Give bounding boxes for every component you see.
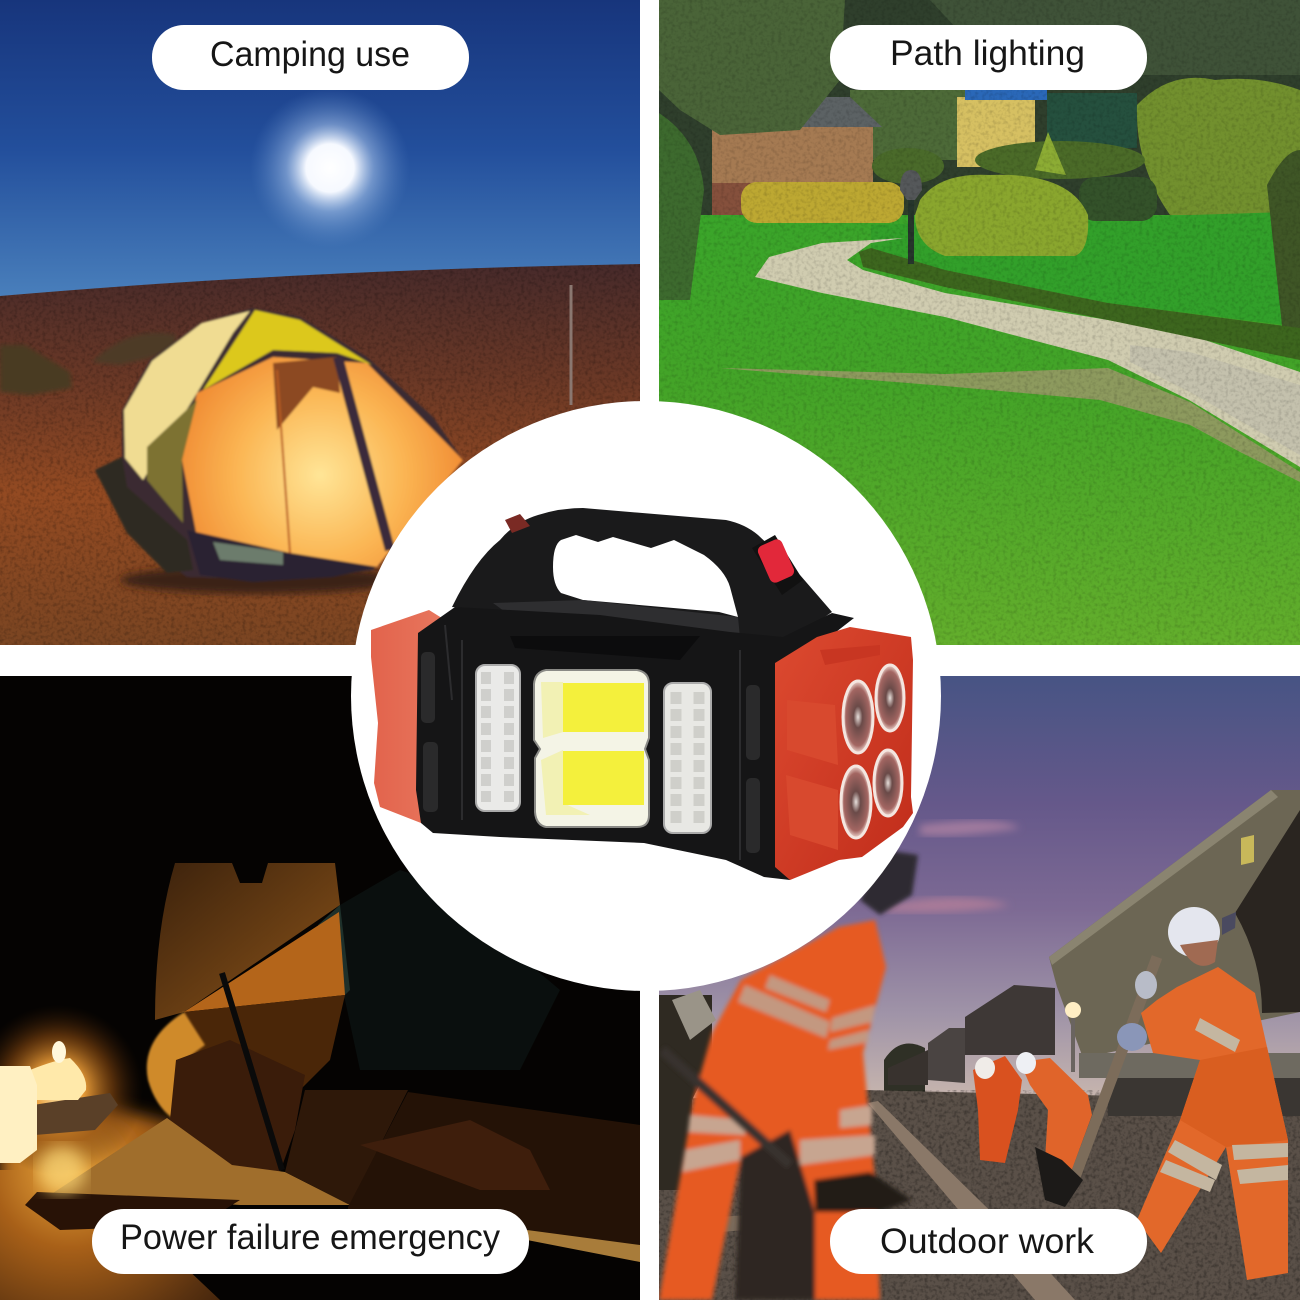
sleepers [724, 1216, 740, 1232]
shovel [1075, 957, 1157, 1177]
writing hand [170, 1040, 305, 1172]
tent [95, 308, 463, 594]
yellow hedge [741, 182, 904, 223]
far trees and ground [884, 1044, 925, 1092]
train wagons [888, 790, 1300, 1116]
icon: moon glow [258, 95, 402, 238]
other hand [360, 1120, 550, 1190]
background shade [155, 863, 340, 1020]
left shrub [659, 113, 704, 300]
label: power failure emergency: Power failure emergency [120, 1218, 500, 1257]
panel: path lighting [659, 0, 1300, 645]
handle [452, 508, 832, 645]
label: camping use [152, 25, 469, 90]
gazebo [800, 97, 882, 127]
speaker slots [421, 652, 760, 853]
icon: candles [0, 1005, 143, 1194]
handle opening [553, 535, 738, 617]
worker right [1117, 907, 1288, 1280]
low hedge border [859, 248, 1300, 360]
left red end [371, 610, 445, 823]
spruce [1047, 93, 1137, 148]
left dark ground [659, 995, 712, 1190]
label: outdoor work: Outdoor work [880, 1222, 1095, 1261]
right red head [775, 627, 913, 880]
lenses [841, 665, 904, 838]
right hedge [1267, 150, 1300, 328]
top plate [493, 600, 740, 638]
main body [416, 607, 854, 880]
label: path lighting: Path lighting [890, 34, 1085, 73]
small workers [973, 1052, 1092, 1175]
central white circle [351, 401, 941, 991]
product: solar flashlight [371, 508, 913, 880]
worker left [659, 850, 918, 1300]
right LED panel [664, 683, 711, 833]
shirt [318, 870, 560, 1070]
pine [659, 0, 845, 135]
background trees [659, 0, 1300, 215]
center COB panel [534, 670, 649, 827]
arm [184, 912, 345, 1012]
dark hedges [872, 148, 944, 184]
rail [868, 1101, 1075, 1300]
round bush [915, 175, 1088, 256]
gravel strip [720, 368, 1300, 482]
lamp post [900, 170, 922, 264]
label: outdoor work [830, 1209, 1147, 1274]
left LED panel [476, 665, 520, 811]
label: path lighting [830, 25, 1147, 90]
book [53, 1118, 350, 1205]
panel: power failure emergency [0, 676, 640, 1300]
label: power failure emergency [92, 1209, 529, 1274]
large trees [1137, 78, 1300, 215]
panel: outdoor work [659, 676, 1300, 1300]
path [755, 238, 1300, 467]
pen [222, 973, 282, 1170]
yellow house [957, 97, 1035, 167]
label: camping use: Camping use [210, 35, 410, 74]
red switch [752, 535, 803, 595]
lawn upper right [871, 212, 1285, 325]
panel: camping use [0, 0, 640, 645]
table glow [0, 1100, 182, 1170]
